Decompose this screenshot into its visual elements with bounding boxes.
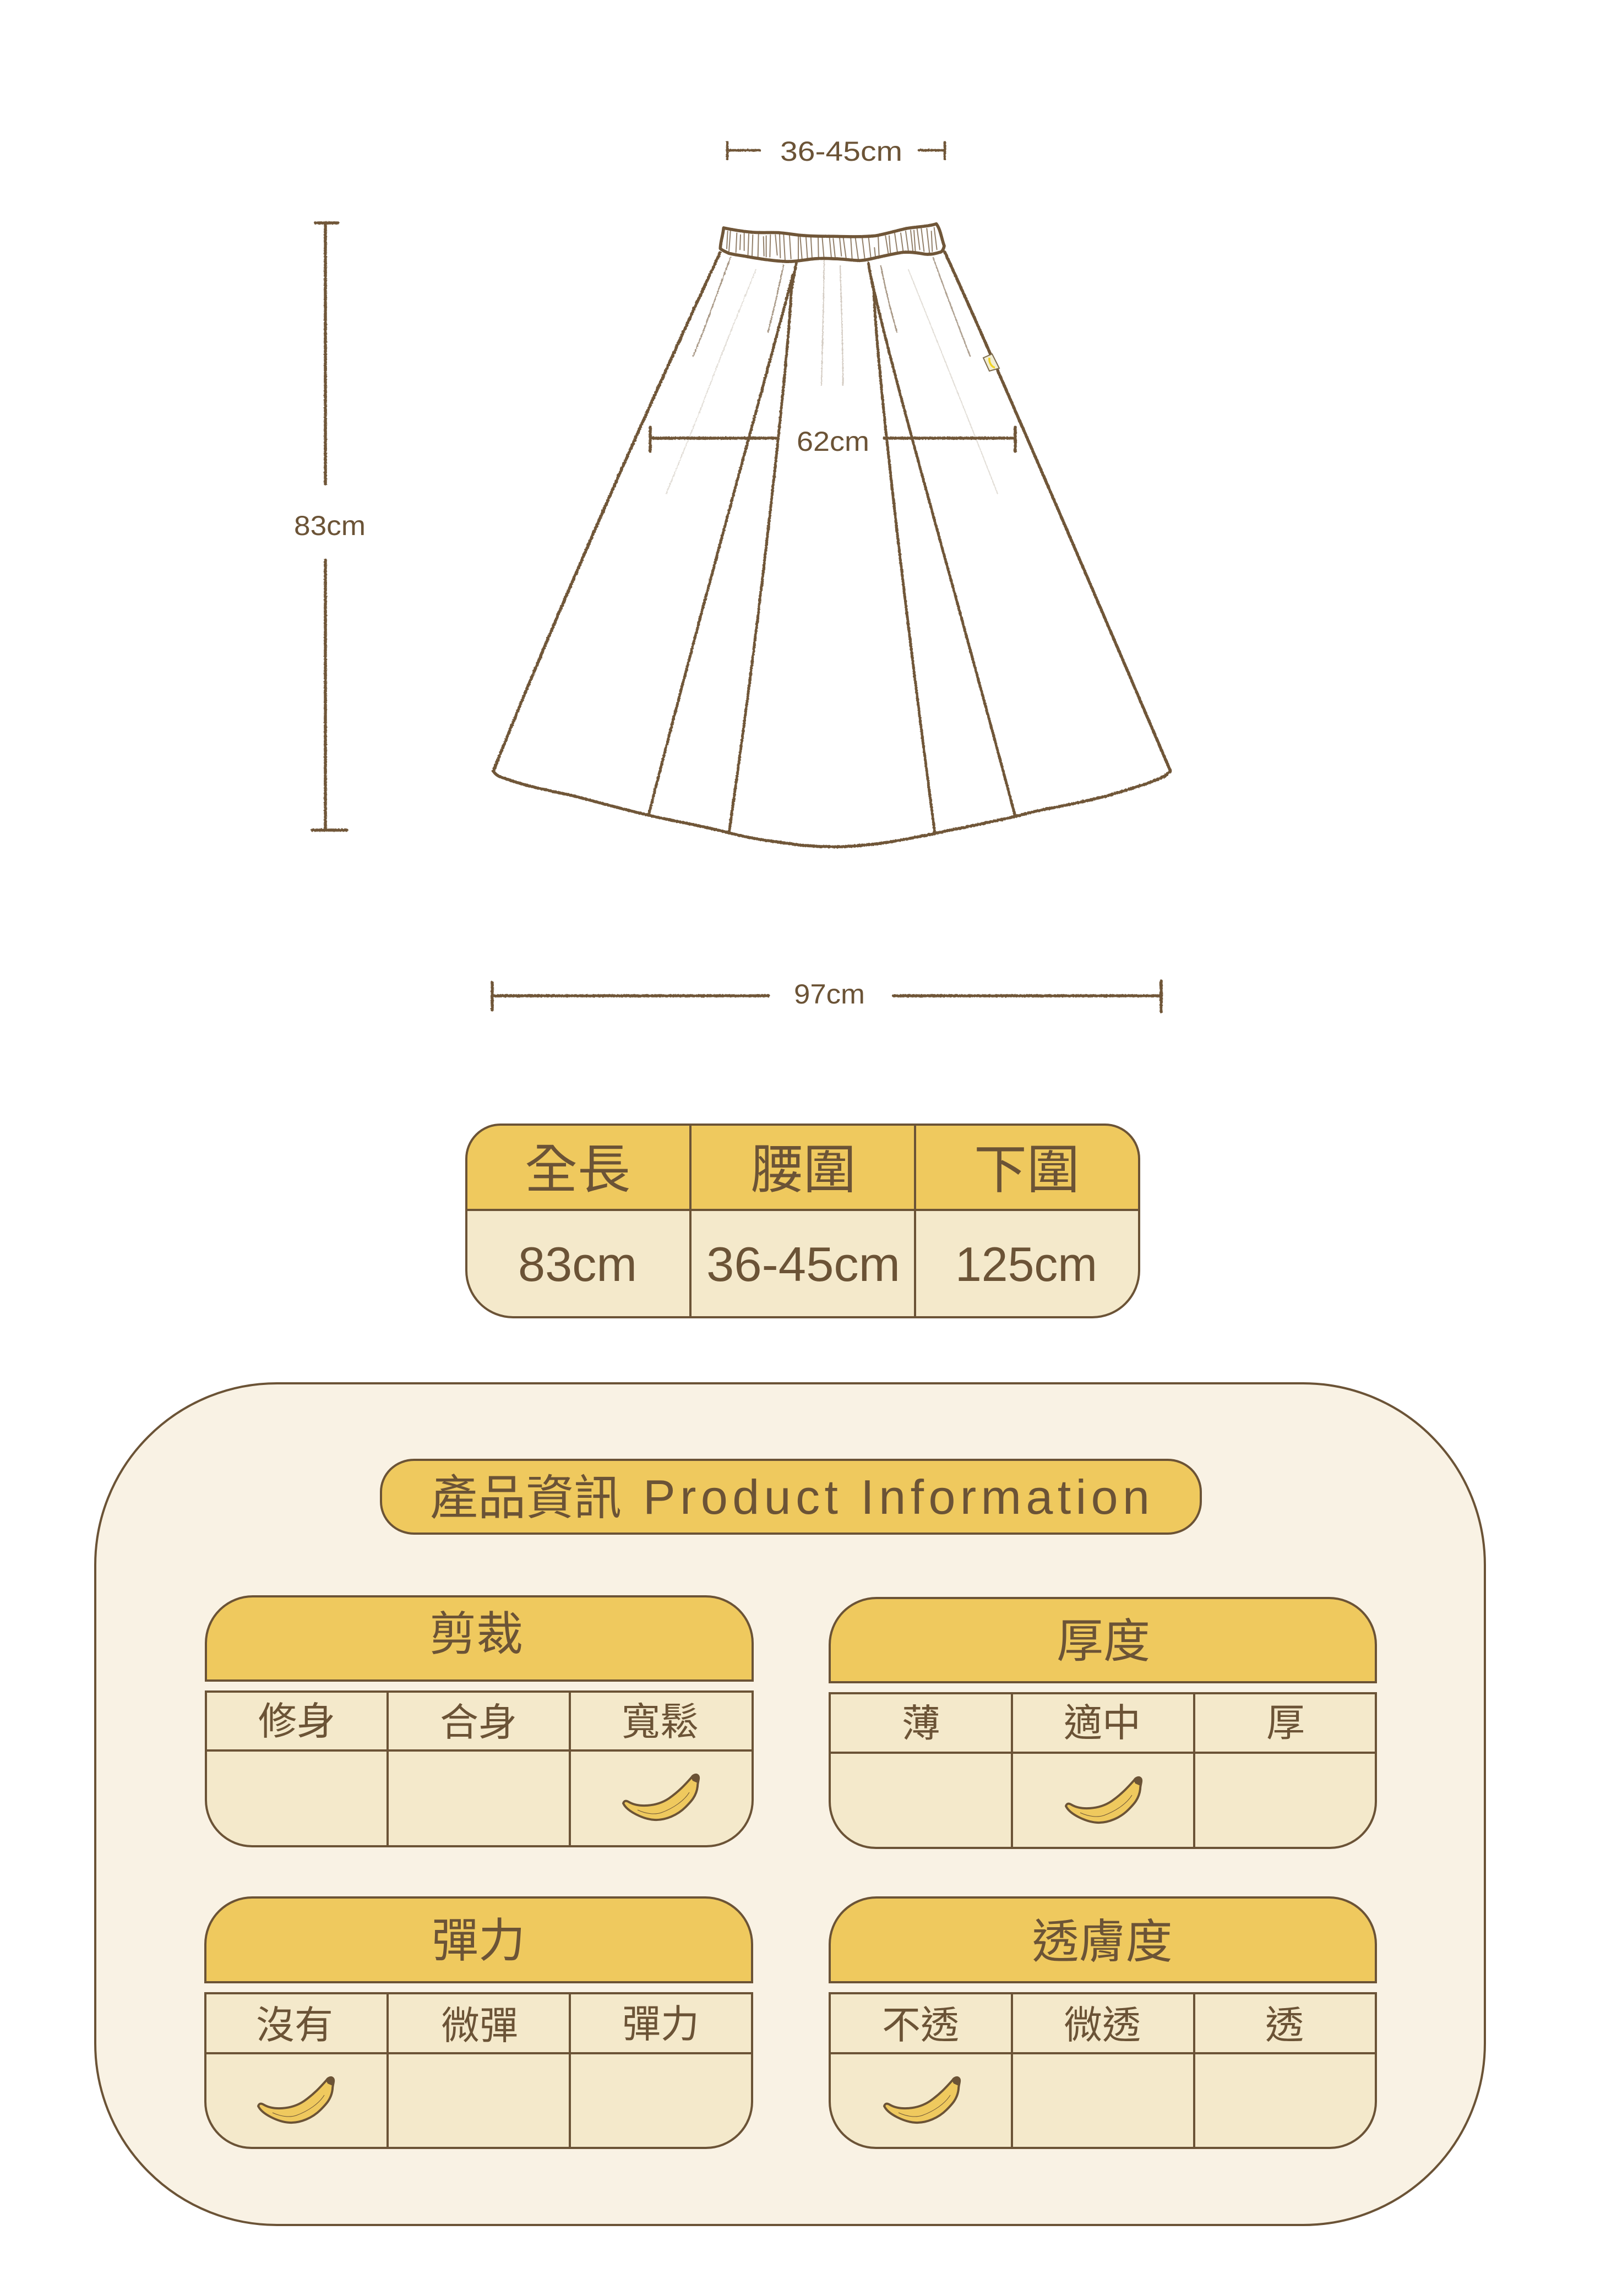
skirt seams — [649, 263, 1015, 833]
icon: skirt label tag — [983, 354, 999, 371]
panel: elasticity: 沒有 — [256, 2004, 333, 2047]
table heading: waist: 腰圍 — [750, 1141, 856, 1199]
size table value row — [466, 1210, 1139, 1317]
size table header row — [466, 1125, 1139, 1210]
heading: product information — [381, 1460, 1201, 1534]
panel: elasticity — [205, 1897, 752, 2148]
panel: elasticity: 彈力 — [622, 2003, 699, 2046]
cut table — [206, 1692, 753, 1846]
table value: 36-45cm: 36-45cm — [706, 1237, 900, 1291]
heading: product information: 產品資訊 — [430, 1471, 622, 1525]
panel: cut: 合身 — [440, 1701, 517, 1744]
elasticity table — [205, 1993, 752, 2148]
panel: transparency: 不透 — [882, 2004, 959, 2047]
panel: product information — [95, 1383, 1485, 2225]
panel: elasticity: 彈力 — [432, 1915, 525, 1967]
table heading: total length: 全長 — [525, 1141, 630, 1199]
dimension: waist 36-45cm — [727, 136, 945, 167]
transparency table — [830, 1993, 1376, 2148]
dimension: hem 97cm — [492, 979, 1161, 1012]
panel: thickness — [830, 1598, 1376, 1848]
heading: product information: Product Information — [643, 1470, 1150, 1524]
panel: transparency — [830, 1897, 1376, 2148]
panel: elasticity: 微彈 — [441, 2004, 518, 2047]
dimension: hem 97cm: 97cm — [794, 979, 865, 1010]
cut heading — [206, 1596, 753, 1681]
thickness table — [830, 1693, 1376, 1848]
panel: transparency: 透膚度 — [1032, 1916, 1173, 1968]
panel: cut: 修身 — [258, 1700, 335, 1743]
table value: 125cm: 125cm — [955, 1237, 1097, 1291]
panel: thickness: 厚度 — [1057, 1616, 1150, 1668]
skirt waistband — [720, 224, 944, 261]
dimension: waist 36-45cm: 36-45cm — [780, 136, 902, 167]
icon: banana marker — [1066, 1777, 1141, 1823]
table value: 83cm: 83cm — [518, 1237, 637, 1291]
dimension: length 83cm: 83cm — [294, 510, 366, 541]
icon: banana marker — [884, 2077, 960, 2123]
panel: cut: 剪裁 — [429, 1608, 523, 1661]
thickness heading — [830, 1598, 1376, 1682]
skirt illustration — [493, 224, 1171, 847]
panel: transparency: 微透 — [1064, 2004, 1141, 2047]
skirt outline — [493, 252, 1171, 847]
panel: cut: 寬鬆 — [622, 1700, 699, 1743]
icon: banana marker — [623, 1775, 699, 1820]
table heading: hem: 下圍 — [974, 1141, 1080, 1199]
elasticity heading — [205, 1897, 752, 1982]
size table — [466, 1125, 1139, 1317]
dimension: hip 62cm: 62cm — [797, 426, 869, 457]
panel: thickness: 薄 — [902, 1702, 940, 1745]
panel: transparency: 透 — [1265, 2004, 1304, 2047]
panel: cut — [206, 1596, 753, 1846]
dimension: hip 62cm — [650, 426, 1015, 457]
skirt fold lines — [666, 257, 998, 494]
dimension: length 83cm — [294, 223, 366, 830]
panel: thickness: 厚 — [1266, 1701, 1305, 1744]
panel: thickness: 適中 — [1064, 1701, 1141, 1744]
icon: banana marker — [258, 2077, 334, 2123]
transparency heading — [830, 1897, 1376, 1982]
